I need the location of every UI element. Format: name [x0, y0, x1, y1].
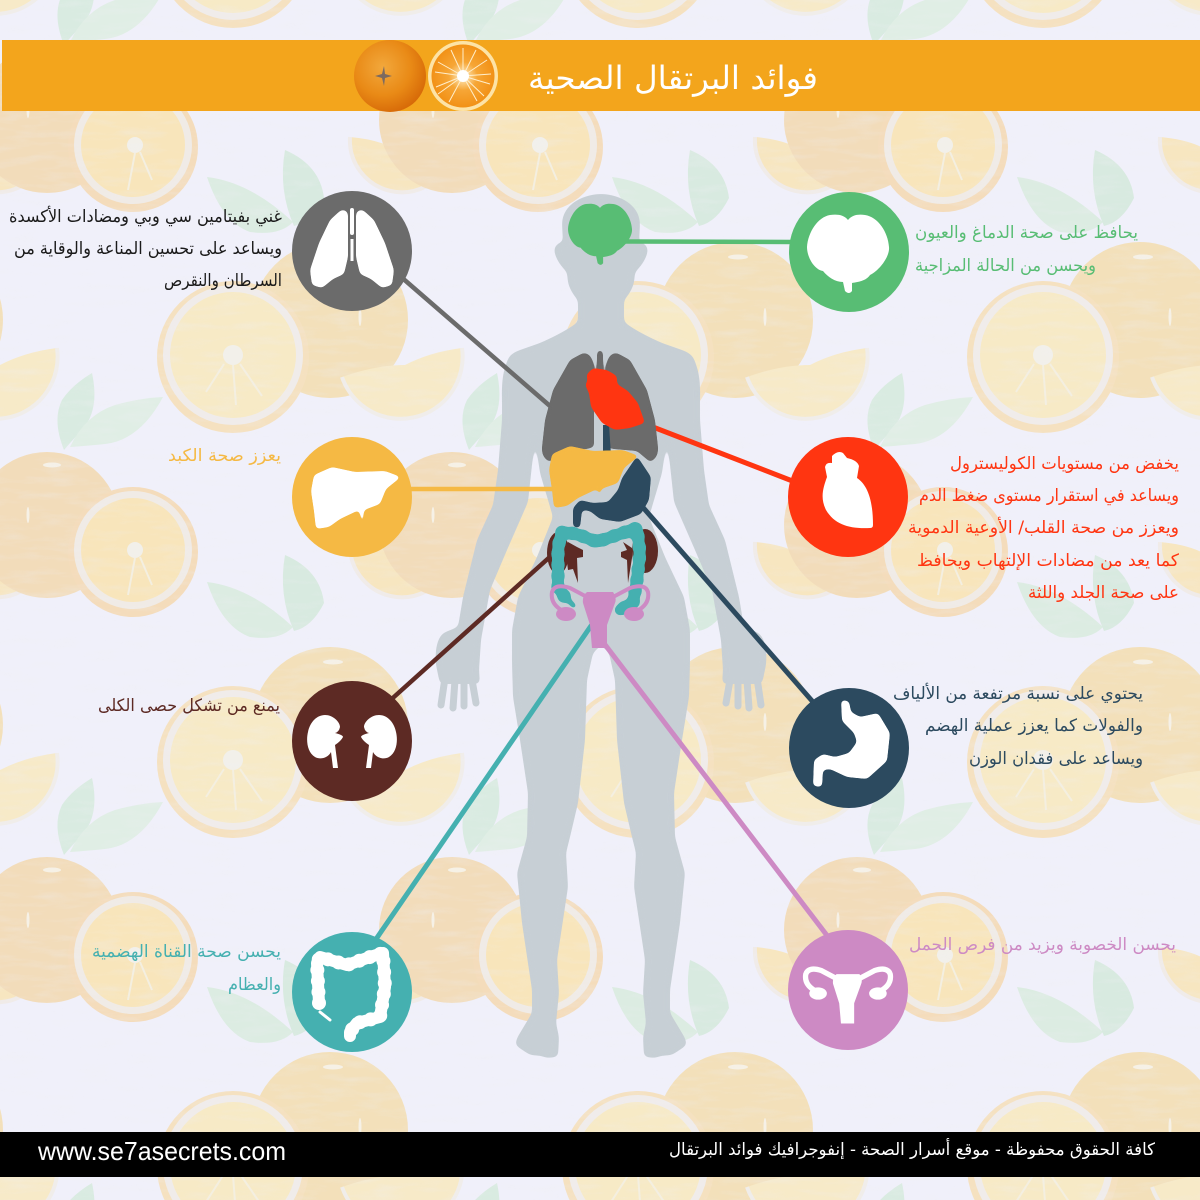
text: brain benefit: يحافظ على صحة الدماغ والعيون: [915, 223, 1138, 243]
text: stomach benefit: يحتوي على نسبة مرتفعة من الألياف: [893, 683, 1143, 704]
footer bar: [0, 1132, 1200, 1177]
text: intestine benefit: يحسن صحة القناة الهضمية: [92, 942, 281, 962]
icon: kidneys: [307, 715, 397, 768]
text: brain benefit: [915, 223, 1138, 276]
icon: brain: [807, 215, 889, 293]
text: liver benefit: يعزز صحة الكبد: [168, 446, 281, 466]
icon: whole orange: [354, 40, 426, 112]
hand fingers: [441, 678, 761, 708]
organ: uterus: [552, 586, 648, 648]
panel: uterus icon: [788, 930, 908, 1050]
connector: lungs: [400, 276, 550, 406]
text: heart benefit: على صحة الجلد واللثة: [1028, 583, 1179, 603]
text: lungs benefit: [9, 206, 282, 291]
text: intestine benefit: والعظام: [228, 975, 281, 995]
panel: kidneys icon: [292, 681, 412, 801]
connector: intestine: [372, 620, 595, 945]
organ: esophagus: [603, 425, 611, 455]
text: stomach benefit: [893, 683, 1143, 769]
title: فوائد البرتقال الصحية: [528, 59, 818, 97]
text: stomach benefit: ويساعد على فقدان الوزن: [969, 749, 1143, 769]
text: lungs benefit: ويساعد على تحسين المناعة والوقاية من: [14, 239, 282, 259]
organ: liver: [549, 446, 639, 508]
icon: large intestine: [317, 953, 385, 1036]
organ: lungs: [542, 350, 658, 462]
organ: brain: [568, 204, 632, 265]
panel: brain icon: [789, 192, 909, 312]
panel: stomach icon: [789, 688, 909, 808]
icon: lungs: [310, 210, 394, 288]
text: lungs benefit: السرطان والنقرص: [164, 271, 282, 291]
panel: heart icon: [788, 437, 908, 557]
connector: heart: [640, 422, 795, 482]
organ: heart: [585, 368, 645, 430]
text: heart benefit: ويساعد في استقرار مستوى ضغط الدم: [919, 486, 1179, 506]
organ: large intestine: [558, 528, 640, 610]
connector: stomach: [640, 504, 820, 710]
text: stomach benefit: والفولات كما يعزز عملية الهضم: [925, 716, 1143, 736]
title band: [2, 40, 1200, 112]
icon: uterus: [806, 969, 890, 1023]
text: uterus benefit: يحسن الخصوبة ويزيد من فرص الحمل: [909, 935, 1176, 955]
icon: lungs trachea: [350, 208, 354, 261]
text: heart benefit: ويعزز من صحة القلب/ الأوعية الدموية: [908, 517, 1179, 538]
text: intestine benefit: [92, 942, 281, 995]
connector: liver: [400, 487, 560, 491]
connector: uterus: [603, 642, 832, 942]
connector: brain: [625, 239, 795, 244]
text: heart benefit: [908, 454, 1180, 603]
panel: liver icon: [292, 437, 412, 557]
icon: heart: [823, 452, 873, 528]
text: heart benefit: كما يعد من مضادات الإلتهاب ويحافظ: [917, 551, 1180, 571]
footer credit: كافة الحقوق محفوظة - موقع أسرار الصحة - إنفوجرافيك فوائد البرتقال: [669, 1138, 1156, 1160]
human body silhouette: [436, 194, 766, 1058]
panel: lungs icon: [292, 191, 412, 311]
connector: kidneys: [385, 555, 552, 705]
icon: orange slice: [428, 41, 498, 111]
organ: stomach: [573, 456, 651, 528]
panel: intestine icon: [292, 932, 412, 1052]
text: lungs benefit: غني بفيتامين سي وبي ومضادات الأكسدة: [9, 206, 282, 227]
footer website: www.se7asecrets.com: [37, 1136, 286, 1166]
text: brain benefit: ويحسن من الحالة المزاجية: [915, 256, 1096, 276]
text: kidneys benefit: يمنع من تشكل حصى الكلى: [98, 696, 280, 716]
icon: stomach: [813, 700, 890, 787]
organ: kidneys: [547, 529, 658, 583]
icon: liver: [311, 467, 401, 530]
text: heart benefit: يخفض من مستويات الكوليسترول: [950, 454, 1179, 474]
